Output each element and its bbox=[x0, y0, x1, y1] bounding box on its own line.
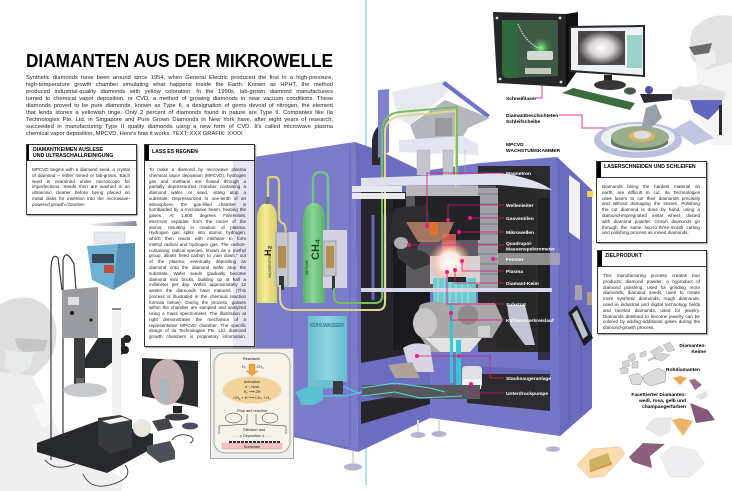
panel text: products: diamond powder, a byproduct of bbox=[603, 279, 700, 284]
panel: seed selection and ultrasonic cleaning bbox=[26, 144, 137, 215]
activation: H₂ ⟶ 2H bbox=[244, 390, 261, 394]
panel text: Diamonds destined to become jewelry can be bbox=[603, 314, 700, 319]
panel heading bbox=[597, 162, 706, 178]
panel text: Diamonds being the hardest material on bbox=[602, 184, 700, 189]
panel text: representative MPCVD chamber. The specific bbox=[149, 323, 246, 328]
panel text: weeks the diamonds have matured. (This bbox=[149, 288, 246, 293]
activation bbox=[222, 376, 282, 404]
panel text: and polishing process as mined diamonds. bbox=[602, 230, 689, 235]
panel text: diamond-growth process. bbox=[603, 325, 655, 330]
panel text: ultrasonic cleaner before being placed on bbox=[32, 190, 130, 195]
illustration: MPCVD growth chamber cabinet bbox=[233, 81, 593, 471]
chamber labels, white: Massenspektrometer bbox=[506, 246, 555, 252]
chamber labels, white: Substrat bbox=[506, 302, 526, 308]
panel text: chemical vapor deposition (MPCVD), hydrogen bbox=[149, 173, 246, 178]
panel text: diamond mini bricks, building up at half a bbox=[149, 277, 246, 282]
panel text: right demonstrates the mechanics of a bbox=[149, 317, 246, 322]
panel text: MPCVD begins with a diamond seed, a crystal bbox=[32, 167, 130, 172]
intro text: succeeded in manufacturing Type II quality diamonds using a new form of CVD. It's called microwave plasma bbox=[26, 124, 333, 130]
panel text: within the chamber are sampled and analyzed bbox=[149, 305, 246, 310]
cabinet left face bbox=[233, 142, 358, 452]
panel text: of the plasma, eventually depositing as bbox=[149, 259, 246, 264]
panel text bbox=[149, 167, 246, 339]
panel: laser cutting and polishing bbox=[596, 161, 707, 243]
labels, black: MPCVD bbox=[506, 142, 524, 148]
labels, black: Diamanten- bbox=[679, 343, 706, 349]
rough diamonds bbox=[629, 368, 666, 386]
chamber labels, white: Diamant-Keim bbox=[506, 281, 540, 287]
labels, black: Schleifscheibe bbox=[506, 119, 541, 125]
chart: chemical reaction diagram bbox=[210, 348, 294, 459]
diffusion and deposition: Substrate bbox=[244, 445, 260, 449]
intro text: produced industrial-quality diamonds with yellow coloration. In the 1990s, lab-grown diamond manufacturers bbox=[26, 88, 333, 94]
reactants: CH₄ bbox=[256, 365, 264, 369]
intro text: turned to chemical vapor deposition, or CVD, a method of growing diamonds in near vacuum conditions. These bbox=[26, 96, 333, 102]
panel text: substrate. Wafer seeds gradually become bbox=[149, 271, 246, 276]
panel text: process is illustrated in the chemical reaction bbox=[149, 294, 246, 299]
tank label: KÜHLWASSER bbox=[310, 322, 344, 329]
panel heading bbox=[598, 251, 706, 267]
labels, black: weiß, rosa, gelb und bbox=[638, 398, 686, 404]
panel text: earth, are difficult to cut. Ila Technologies bbox=[602, 190, 700, 195]
panel text: colored by adding additional gases during the bbox=[603, 319, 700, 324]
substrate bbox=[433, 278, 476, 303]
computer monitor bbox=[562, 25, 645, 110]
methane label: METHAN bbox=[305, 260, 309, 275]
reactants bbox=[242, 357, 264, 376]
labels, black: Facettierter Diamanten: bbox=[631, 392, 686, 398]
seeds bbox=[620, 342, 675, 374]
panel text: uses lasers to cut their diamonds precisely bbox=[602, 196, 700, 201]
panel: let it rain bbox=[144, 144, 255, 347]
panel text: used in industrial and digital technology fields bbox=[603, 302, 700, 307]
labels, black: Rohdiamanten bbox=[666, 367, 700, 373]
panel text: with diamond powder. Grown diamonds go bbox=[602, 219, 700, 224]
panel text: containing radical species, known as a methyl bbox=[149, 248, 246, 253]
panel text: partially depressurized chamber containing a bbox=[149, 184, 246, 189]
cylinder: methane bbox=[303, 172, 328, 303]
panel text: millimeter per day. Within approximately 12 bbox=[149, 282, 246, 287]
labels, black: Schneißlaser bbox=[506, 96, 537, 102]
panel text: imperfections. Seeds then are washed in an bbox=[32, 184, 130, 189]
labels, black: Keime bbox=[691, 349, 706, 355]
panel text: design of Ila Technologies Pte. Ltd. diamond bbox=[149, 328, 246, 333]
reactor chamber bbox=[352, 173, 560, 390]
labels, black bbox=[506, 96, 706, 410]
gas tubes bbox=[280, 107, 478, 310]
right dark interior bbox=[467, 166, 550, 411]
diffusion and deposition: Diffusion and bbox=[243, 428, 265, 432]
machine feet bbox=[344, 420, 560, 471]
labels, black: champangerfarben bbox=[642, 404, 686, 410]
chamber labels, white: Unterdruckpumpe bbox=[506, 391, 548, 397]
panel text: atmosphere, the gas-filled chamber is bbox=[149, 202, 246, 207]
panel text: gases. At 1,800 degrees Fahrenheit, bbox=[149, 213, 246, 218]
panel text: diamond wafer, or seed, sitting atop a bbox=[149, 190, 246, 195]
panel heading: ZIELPRODUKT bbox=[605, 253, 642, 259]
illustration: microscope bbox=[37, 255, 193, 486]
panel text bbox=[602, 184, 700, 235]
panel text: diamond polishing, used for grinding more bbox=[603, 285, 700, 290]
chamber labels, white bbox=[506, 171, 555, 397]
person: left technician bbox=[0, 298, 122, 491]
chamber labels, white: Wellenleiter bbox=[506, 203, 533, 209]
panel text: growth chambers is proprietary information. bbox=[149, 334, 246, 339]
reactants: H₂ bbox=[242, 365, 247, 369]
cylinder: hydrogen: H₂ bbox=[263, 246, 273, 256]
panel text: and faceted diamonds, used for jewelry. bbox=[603, 308, 700, 313]
intro text: chemical vapor deposition, MPCVD. Here's how it works. TEXT: XXX GRAFIK: XXXX bbox=[26, 130, 243, 136]
panel: end product bbox=[597, 250, 707, 334]
fold line bbox=[365, 0, 367, 485]
panel text: using a mass spectrometer. The illustration at bbox=[149, 311, 246, 316]
chamber labels, white: Magnetron bbox=[506, 171, 531, 177]
regulator: methane bbox=[323, 230, 347, 290]
leader lines and markers bbox=[407, 56, 627, 393]
panel text: and without damaging the stones. Polishing bbox=[602, 201, 700, 206]
cylinder: hydrogen bbox=[257, 177, 286, 303]
panel text: gas and methane are flowed through a bbox=[149, 179, 246, 184]
panel heading: DIAMANTKEIMEN AUSLESE bbox=[33, 147, 103, 153]
regulator: hydrogen bbox=[275, 232, 297, 290]
reactants: Reactants bbox=[243, 357, 260, 361]
intro text: Synthetic diamonds have been around since 1954, when General Electric produced the first in a high-pressure, bbox=[26, 74, 333, 80]
panel text: which then reacts with methane to form bbox=[149, 236, 246, 241]
labels, black: WACHSTUMSKAMMER bbox=[506, 148, 561, 154]
activation: e⁻, heat bbox=[245, 385, 260, 389]
panel text: atoms, resulting in creation of plasma. bbox=[149, 225, 246, 230]
panel text: through the same two-to-three-month cutting bbox=[602, 225, 700, 230]
cylinder: methane: CH₄ bbox=[310, 239, 322, 260]
panel text: of diamond – either mined or lab-grown. Each bbox=[32, 173, 130, 178]
intro text: high-temperature growth chamber simulating what happens inside the Earth. Known as HPHT, the method bbox=[26, 82, 333, 88]
panel text: bombarded by a microwave beam, heating the bbox=[149, 207, 246, 212]
panel text: diamonds; diamond seeds, used to create bbox=[603, 290, 700, 295]
intro text bbox=[26, 74, 333, 136]
cabinet back right face bbox=[430, 157, 592, 436]
panel heading: LASERSCHNEIDEN UND SCHLEIFEN bbox=[604, 164, 696, 170]
panel text: group, allows freed carbon to „rain down,“ out bbox=[149, 253, 246, 258]
hydrogen label: WASSERSTOFF bbox=[268, 252, 272, 278]
panel text: diamond-impregnated metal wheel, dusted bbox=[602, 213, 700, 218]
chamber labels, white: Plasma bbox=[506, 269, 523, 275]
diffusion and deposition: - - - ‡ Deposition ‡ - - - bbox=[233, 434, 272, 438]
chamber labels, white: Gasventilen bbox=[506, 216, 534, 222]
activation: CH₄ + H ⟶ CH₃ + H₂ bbox=[233, 396, 271, 400]
chamber labels, white: Fenster bbox=[506, 257, 524, 263]
panel heading: LASS ES REGNEN bbox=[152, 149, 198, 155]
panel text: seed is examined under microscope for bbox=[32, 179, 130, 184]
person: right technician bbox=[672, 15, 732, 145]
intro text: diamonds proved to be pure diamonds, known as Type II, a designation of gems devoid of nitrogen, the element bbox=[26, 102, 333, 108]
flow and reaction: Flow and reaction bbox=[237, 409, 267, 413]
diffusion and deposition bbox=[222, 428, 282, 449]
top frame with tubes bbox=[372, 81, 490, 175]
panel heading bbox=[145, 145, 254, 161]
panel text: To make a diamond by microwave plasma bbox=[149, 167, 246, 172]
tank: cooling water bbox=[295, 316, 347, 405]
lower chamber bbox=[413, 302, 503, 352]
chamber labels, white: Staubsaugeranlage bbox=[506, 376, 551, 382]
faceted diamonds bbox=[577, 376, 715, 478]
chamber labels, white: Mikrowellen bbox=[506, 230, 534, 236]
activation: Activation bbox=[244, 380, 260, 384]
panel text bbox=[603, 273, 700, 330]
cabinet door labels bbox=[569, 175, 593, 305]
panel text: This manufacturing process creates four bbox=[603, 273, 700, 278]
intro text: that lends stones a yellowish tinge. Only 2 percent of diamonds found in nature are Type II. Companies like Ila bbox=[26, 110, 333, 116]
panel text: Hydrogen gas splits into atomic hydrogen, bbox=[149, 230, 246, 235]
panel text: more synthetic diamonds; rough diamonds, bbox=[603, 296, 700, 301]
panel heading: UND ULTRASCHALLREINIGUNG bbox=[33, 153, 113, 159]
panel text: substrate. Depressurized to one-tenth of an bbox=[149, 196, 246, 201]
panel text: formula below). During the process, gasses bbox=[149, 300, 246, 305]
grinding wheel bbox=[594, 86, 722, 158]
illustration: ultrasonic cleaner bbox=[86, 221, 137, 290]
chamber labels, white: Kühlwasserkreislauf bbox=[506, 318, 554, 324]
labels, black: Diamantbeschichteten bbox=[506, 113, 558, 119]
panel text: electrons separate from the nuclei of the bbox=[149, 219, 246, 224]
panel text: powered growth-chamber. bbox=[32, 202, 85, 207]
control tablet bbox=[568, 305, 593, 346]
panel text: the cut diamond is done by hand, using a bbox=[602, 207, 700, 212]
cabinet middle face bbox=[355, 142, 430, 452]
panel text: diamond onto the diamond wafer atop the bbox=[149, 265, 246, 270]
chamber labels, white: Quadrupol- bbox=[506, 241, 533, 247]
panel heading bbox=[27, 145, 136, 161]
lower machinery and pipes bbox=[320, 343, 482, 399]
panel text bbox=[32, 167, 130, 207]
intro text: Technologies Pte. Ltd. in Singapore and Pure Grown Diamonds in New York have, after eight years of research, bbox=[26, 116, 333, 122]
left dark interior bbox=[361, 192, 430, 424]
panel text: methyl radical and hydrogen gas. The carbon- bbox=[149, 242, 246, 247]
illustration: laser cutter bbox=[493, 12, 578, 87]
microscope monitor bbox=[142, 358, 198, 431]
panel text: metal disks for insertion into the microwave- bbox=[32, 196, 130, 201]
